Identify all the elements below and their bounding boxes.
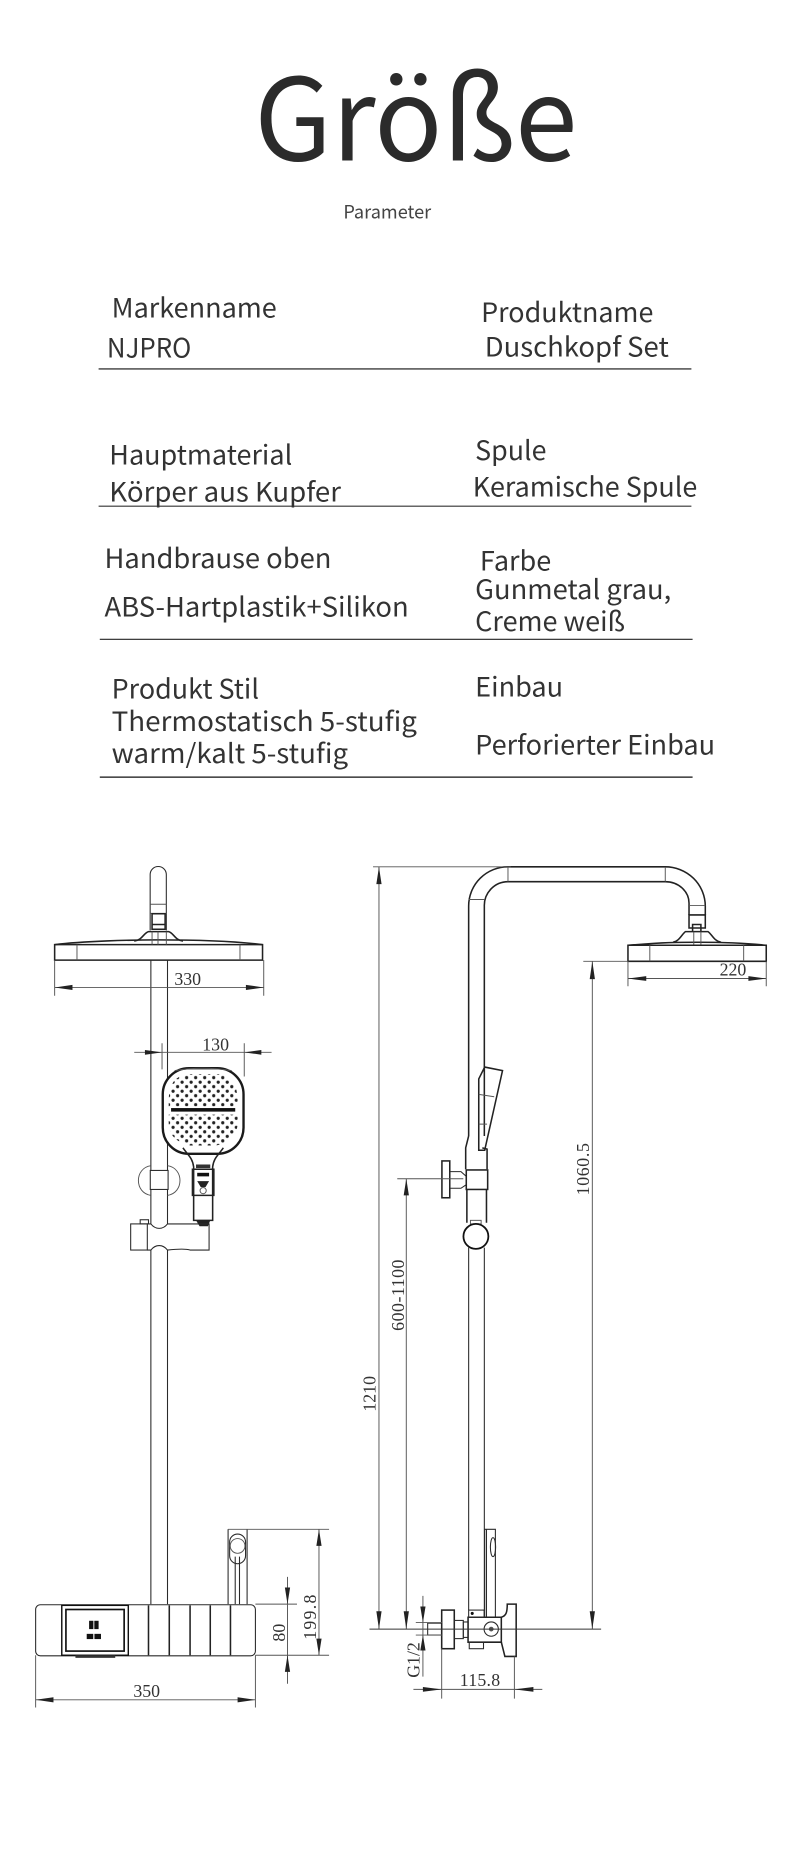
dimension 130: 130 [202,1034,229,1054]
riser pipe [151,960,168,1604]
dimension 600-1100: 600-1100 [388,1259,408,1331]
row 3: hand shower: ABS-Hartplastik+Silikon [105,586,409,625]
parameter table [99,286,715,777]
dimension 199.8 [228,1529,329,1655]
row 2: cartridge: Keramische Spule [473,466,697,505]
dimension 220 [628,960,766,986]
dimension 80: 80 [269,1624,289,1642]
diverter holder [228,1529,247,1604]
control panel [36,1605,255,1658]
slide bar [131,1220,209,1250]
dimension 130 [134,1034,272,1077]
dimension 1060.5 [573,961,628,1629]
title: Größe [254,28,577,193]
hand shower side [479,1067,503,1150]
row 4: product style: warm/kalt 5-stufig [112,732,348,771]
centre line [369,1628,601,1630]
dimension 80 [255,1577,297,1684]
display icons [87,1621,101,1639]
row 3: colour: Gunmetal grau, [475,568,671,607]
row 1: product name: Duschkopf Set [485,325,669,364]
dimension 350 [36,1655,255,1708]
row 4: installation: Perforierter Einbau [475,724,715,763]
row 4: product style: Produkt Stil [112,668,259,707]
valve body [428,1604,516,1656]
dimension G1/2: G1/2 [403,1642,423,1678]
row 3: colour: Creme weiß [475,600,625,639]
front view drawing [36,866,329,1708]
wall holder [485,1529,496,1617]
row 2: main material: Körper aus Kupfer [109,470,342,509]
row 2: main material [109,434,342,509]
dimension 1060.5: 1060.5 [573,1143,593,1195]
holder and knob [442,1136,488,1249]
row 2: cartridge: Spule [475,429,546,468]
dimension 1210 [359,867,511,1629]
side view drawing [359,867,766,1699]
subtitle: Parameter [343,199,432,225]
row 4: installation [475,665,715,763]
dimension 199.8: 199.8 [300,1595,320,1640]
dimension 1210: 1210 [359,1376,379,1412]
row 3: hand shower: Handbrause oben [105,537,331,576]
row 3: hand shower [105,537,409,625]
dimension 350: 350 [133,1681,160,1701]
row 1: brand name: NJPRO [107,327,191,366]
row 4: product style [112,668,417,771]
row 1: brand name [107,286,277,366]
pipe bracket ring [138,1166,180,1195]
row 2: main material: Hauptmaterial [109,434,292,473]
row 3: colour [475,539,671,639]
overhead shower head side [628,915,766,961]
dimension 115.8 [413,1648,542,1699]
dimension 600-1100 [388,1179,463,1629]
riser pipe and arm [469,867,705,1610]
dimension G1/2 [403,1596,442,1678]
row 3: colour: Farbe [480,539,551,578]
row 2: cartridge [473,429,697,505]
dimension 330 [55,960,264,996]
row 1: product name [481,291,669,364]
dimension 220: 220 [720,960,746,980]
row 4: installation: Einbau [475,665,563,704]
dimension 115.8: 115.8 [460,1670,500,1690]
hand shower front [163,1068,244,1226]
dimension 330: 330 [174,969,201,989]
row 1: brand name: Markenname [112,286,277,325]
overhead shower head front [55,866,263,960]
row 4: product style: Thermostatisch 5-stufig [112,700,417,739]
row 1: product name: Produktname [481,291,653,330]
